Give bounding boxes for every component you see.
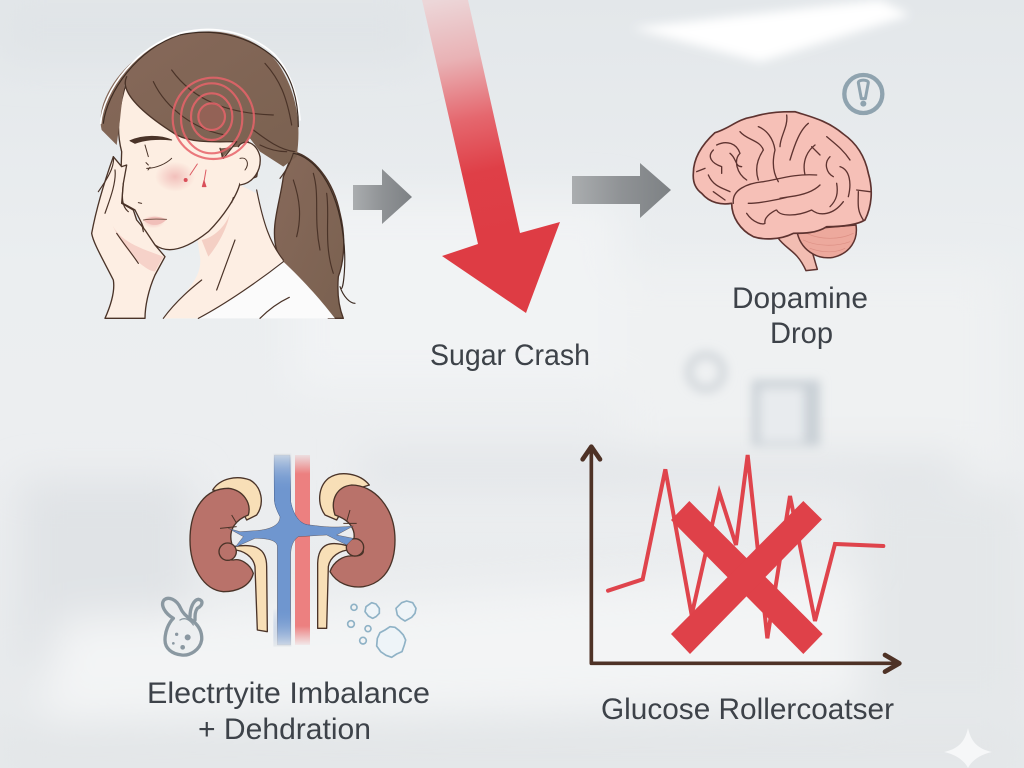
vein bbox=[228, 455, 353, 645]
icon: kidneys bbox=[190, 453, 395, 647]
pain rings bbox=[173, 78, 254, 159]
ponytail bbox=[274, 152, 344, 318]
icon: flask with particles bbox=[163, 598, 202, 655]
arrow: red sugar crash bbox=[422, 0, 560, 313]
cerebellum bbox=[797, 225, 856, 258]
label: electrolyte imbalance: Electrtyite Imbalance bbox=[147, 677, 430, 710]
gyri lines bbox=[697, 115, 870, 224]
label: dopamine drop bbox=[732, 282, 868, 350]
neck bbox=[163, 183, 283, 318]
axes bbox=[583, 447, 899, 672]
icon: crystals bbox=[348, 601, 416, 657]
hand bbox=[92, 157, 165, 318]
icon: warning bbox=[844, 75, 882, 113]
hair white outline bbox=[101, 30, 300, 123]
red cross bbox=[671, 501, 823, 654]
label: electrolyte imbalance: + Dehdration bbox=[198, 713, 371, 746]
artery bbox=[295, 455, 310, 645]
blush bbox=[155, 162, 195, 192]
label: sugar crash: Sugar Crash bbox=[430, 339, 590, 372]
adrenal glands and ureters bbox=[213, 478, 261, 520]
label: dopamine drop: Dopamine bbox=[732, 282, 868, 315]
label: glucose rollercoaster: Glucose Rollercoatser bbox=[601, 693, 894, 726]
hair strand lines bbox=[153, 63, 333, 273]
face bbox=[119, 82, 260, 250]
arrow: grey left bbox=[353, 169, 412, 224]
chart: glucose rollercoaster bbox=[583, 447, 899, 672]
brain stem bbox=[778, 230, 817, 271]
jagged line bbox=[608, 455, 883, 638]
arrow: grey right bbox=[572, 163, 671, 218]
eyebrow, eye, nose, mouth bbox=[130, 136, 172, 143]
label: electrolyte imbalance bbox=[147, 677, 430, 746]
cerebrum bbox=[693, 112, 871, 239]
icon: brain bbox=[693, 112, 871, 271]
icon: woman with headache bbox=[92, 30, 355, 318]
hair bbox=[101, 31, 298, 167]
sparkle watermark bbox=[944, 728, 992, 768]
ear bbox=[238, 142, 260, 185]
shirt bbox=[163, 260, 335, 318]
kidneys bbox=[190, 488, 253, 592]
label: dopamine drop: Drop bbox=[770, 317, 833, 350]
